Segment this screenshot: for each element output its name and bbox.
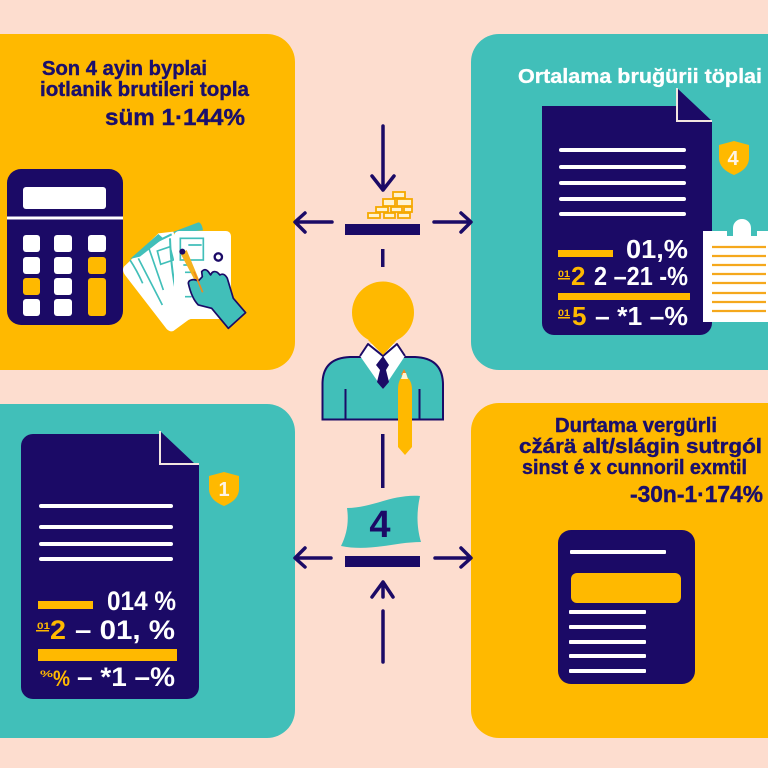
heading: bottom right: cžárä alt/slágin sutrgól	[519, 436, 762, 458]
heading: top left: Son 4 ayin byplai	[42, 58, 207, 80]
icon: gold bricks	[368, 192, 412, 218]
arrow: bottom left	[295, 548, 331, 567]
icon: document with figures: 2 –21 -%	[594, 261, 688, 291]
arrow: top right	[434, 213, 471, 232]
heading: bottom right: sinst é x cunnoril exmtil	[522, 457, 747, 479]
icon: document with figures: 014 %	[107, 586, 176, 616]
collar	[360, 344, 405, 389]
heading: bottom right: -30n-1·174%	[630, 481, 763, 507]
head	[352, 281, 414, 355]
icon: shield badge 1: 1	[218, 479, 230, 501]
heading: bottom right: Durtama vergürli	[555, 415, 717, 437]
arrow: top down	[372, 126, 394, 190]
heading: bottom right	[519, 415, 763, 507]
panel: bottom left document	[0, 404, 295, 738]
body	[322, 357, 443, 420]
icon: shield badge 4: 4	[727, 148, 739, 170]
heading: top right: Ortalama bruğürii töplai	[518, 66, 762, 88]
icon: calculator	[7, 169, 123, 325]
icon: document with figures: 2	[571, 261, 585, 291]
icon: document with figures: 2	[50, 615, 66, 645]
icon: document with figures: 01	[558, 308, 570, 318]
arrow: bottom right	[435, 548, 471, 567]
icon: flag with number 4: 4	[369, 504, 391, 546]
heading: top left	[40, 58, 250, 130]
figure: businessperson with pencil	[322, 281, 443, 455]
icon: notepad	[703, 219, 768, 322]
icon: document with figures	[542, 88, 712, 335]
icon: document with figures	[21, 431, 199, 699]
icon: document with figures: – *1 –%	[77, 662, 175, 692]
icon: document with figures: – 01, %	[75, 615, 175, 645]
icon: shield badge 1	[209, 472, 239, 506]
icon: document with figures: %	[53, 666, 70, 691]
heading: top left: süm 1·144%	[105, 104, 245, 130]
icon: document with figures: %	[40, 669, 53, 679]
panel: top left calculator	[0, 34, 295, 370]
icon: shield badge 4	[719, 141, 749, 175]
connector: lower line	[381, 434, 384, 488]
arrow: top left	[295, 213, 332, 232]
icon: flag with number 4	[341, 496, 421, 548]
icon: papers and hand with pencil	[123, 222, 246, 331]
arrow: bottom up	[372, 582, 393, 662]
panel: bottom right tax summary	[471, 403, 768, 738]
icon: document with figures: 01	[37, 621, 50, 631]
collar outline	[360, 344, 405, 356]
connector: top dash	[381, 249, 384, 267]
top plinth bar	[345, 224, 420, 235]
icon: document with figures: 01	[558, 269, 570, 279]
panel: top right average document	[471, 34, 768, 370]
icon: document with figures: – *1 –%	[595, 301, 688, 331]
icon: form document	[558, 530, 695, 684]
tie	[376, 356, 389, 389]
pencil	[398, 369, 412, 455]
bottom plinth bar	[345, 556, 420, 567]
icon: document with figures: 5	[572, 301, 586, 331]
jacket lines	[346, 389, 420, 420]
heading: top left: iotlanik brutileri topla	[40, 79, 250, 101]
icon: document with figures: 01,%	[626, 234, 688, 264]
